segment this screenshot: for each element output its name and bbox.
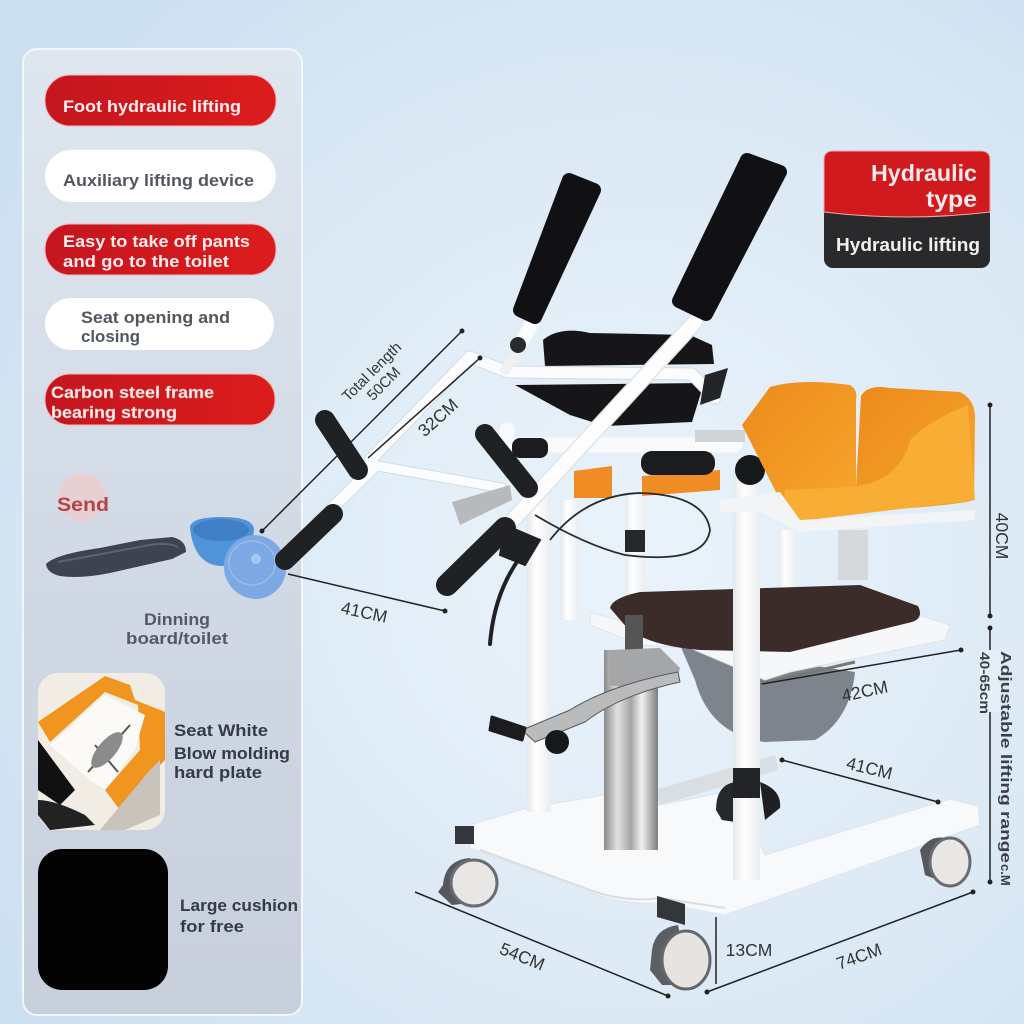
text: dining board / toilet bbox=[126, 611, 229, 648]
pill: carbon steel frame: bearing strong bbox=[51, 404, 177, 422]
product: transfer chair bbox=[285, 160, 980, 989]
dimension: 54CM bbox=[415, 892, 670, 998]
dimension: 74CM bbox=[704, 890, 976, 994]
pill: auxiliary lifting device bbox=[45, 150, 276, 202]
pill: seat opening and closing: closing bbox=[81, 328, 140, 346]
seat tray bbox=[590, 585, 950, 685]
dimension: 41CM arm: 41CM bbox=[339, 597, 389, 627]
pill: easy to take off pants: Easy to take off pants bbox=[63, 233, 250, 251]
support columns bbox=[527, 490, 796, 812]
send badge bbox=[57, 473, 109, 521]
pill: easy to take off pants: and go to the toilet bbox=[63, 253, 230, 271]
text: seat white blow molding hard plate: Seat White bbox=[174, 722, 268, 740]
orange seat back bbox=[512, 382, 975, 580]
icon: toilet bowl bbox=[190, 517, 254, 566]
dimension: adjustable lifting range bbox=[977, 626, 1014, 886]
dimension: 40CM bbox=[988, 402, 1012, 618]
dimension: adjustable lifting range: Adjustable lifting range bbox=[997, 651, 1014, 863]
dimension: 42CM bbox=[762, 648, 964, 706]
dimension: adjustable lifting range: c.M bbox=[998, 864, 1013, 886]
panel: features sidebar bbox=[23, 49, 302, 1015]
dimension: 74CM: 74CM bbox=[834, 939, 884, 974]
pill: foot hydraulic lifting: Foot hydraulic lifting bbox=[63, 98, 241, 116]
dimension: 41CM base bbox=[780, 753, 940, 804]
dimension: 13CM bbox=[716, 917, 772, 984]
dimension: 40CM: 40CM bbox=[992, 513, 1012, 559]
pill: seat opening and closing bbox=[45, 298, 274, 350]
text: dining board / toilet: board/toilet bbox=[126, 630, 229, 648]
pill: foot hydraulic lifting bbox=[45, 75, 276, 126]
pill: easy to take off pants bbox=[45, 224, 276, 275]
dimension: 54CM: 54CM bbox=[497, 938, 548, 974]
back cushion bbox=[515, 331, 714, 426]
knob and joints bbox=[452, 337, 765, 525]
dimension: total length 50CM: Total length bbox=[339, 339, 405, 405]
handles bbox=[285, 420, 540, 644]
image: seat white blow molded plate bbox=[38, 673, 165, 830]
foot pedal bbox=[490, 672, 680, 754]
pill: auxiliary lifting device: Auxiliary lifting device bbox=[63, 172, 254, 190]
pill: seat opening and closing: Seat opening and bbox=[81, 309, 230, 327]
badge: hydraulic type: Hydraulic bbox=[871, 160, 977, 186]
caster wheels bbox=[438, 782, 970, 989]
dimension: 32CM bbox=[368, 356, 482, 458]
pill: carbon steel frame bbox=[45, 374, 275, 425]
text: dining board / toilet: Dinning bbox=[144, 611, 210, 629]
send badge: Send bbox=[57, 495, 109, 516]
dimension: 32CM: 32CM bbox=[414, 394, 462, 441]
badge: hydraulic type: Hydraulic lifting bbox=[836, 234, 980, 255]
pill: carbon steel frame: Carbon steel frame bbox=[51, 384, 214, 402]
chair base bbox=[455, 755, 980, 925]
text: seat white blow molding hard plate: hard plate bbox=[174, 764, 262, 782]
commode bucket bbox=[680, 645, 855, 742]
seat cushion bbox=[610, 585, 920, 652]
badge: hydraulic type bbox=[824, 151, 990, 268]
text: seat white blow molding hard plate bbox=[174, 722, 290, 782]
text: large cushion for free: Large cushion bbox=[180, 897, 298, 915]
front post bbox=[733, 470, 760, 880]
white frame bbox=[318, 322, 735, 534]
text: seat white blow molding hard plate: Blow molding bbox=[174, 745, 290, 763]
icon: dining board bbox=[46, 537, 186, 577]
dimension: adjustable lifting range: 40-65cm bbox=[977, 652, 993, 714]
text: large cushion for free bbox=[180, 897, 298, 936]
dimension: 41CM base: 41CM bbox=[844, 753, 895, 784]
badge: hydraulic type: type bbox=[926, 186, 977, 212]
hydraulic cylinder bbox=[604, 615, 680, 850]
dimension: total length 50CM: 50CM bbox=[364, 364, 404, 404]
icon: toilet bowl lid bbox=[215, 526, 295, 608]
text: large cushion for free: for free bbox=[180, 918, 244, 936]
arm pads bbox=[520, 160, 780, 317]
dimension: total length 50CM bbox=[260, 328, 464, 534]
dimension: 41CM arm bbox=[288, 574, 448, 627]
dimension: 13CM: 13CM bbox=[726, 940, 772, 960]
cable loop bbox=[535, 493, 710, 557]
image: large black cushion bbox=[38, 849, 168, 990]
dimension: 42CM: 42CM bbox=[840, 676, 890, 706]
